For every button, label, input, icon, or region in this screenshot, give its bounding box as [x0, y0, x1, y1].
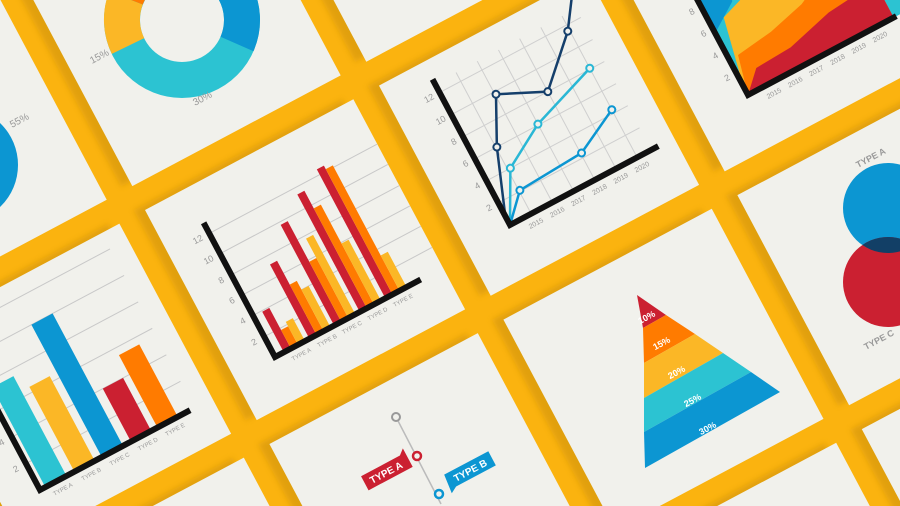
pyramid chart: 25% [682, 392, 703, 409]
stacked area chart: 2016 [787, 76, 804, 89]
pyramid chart: 30% [697, 420, 718, 437]
bar chart: single colored bars [0, 240, 201, 506]
tag: type B: TYPE B [452, 458, 489, 485]
line chart: 2017 [570, 195, 587, 208]
bar chart: single colored bars: 2 [11, 463, 20, 474]
line chart: 2016 [549, 206, 566, 219]
pyramid chart [636, 295, 780, 468]
bar chart: grouped red/orange/yellow: 2 [249, 336, 259, 348]
bar chart: single colored bars: TYPE E [165, 423, 186, 438]
line chart: 6 [461, 158, 470, 169]
bar chart: grouped red/orange/yellow: TYPE B [317, 334, 338, 349]
line chart: 2 [484, 202, 494, 213]
bar chart: grouped red/orange/yellow: TYPE D [367, 307, 390, 322]
tag: type A: TYPE A [368, 460, 405, 487]
stacked area chart: 6 [699, 28, 708, 39]
stacked area chart: 2017 [808, 65, 825, 78]
line chart: 10 [434, 113, 447, 127]
bar chart: single colored bars: TYPE A [53, 483, 74, 498]
bar chart: grouped red/orange/yellow: 10 [202, 253, 215, 267]
line chart [415, 0, 665, 246]
timeline [359, 413, 498, 504]
line chart: 8 [449, 136, 458, 147]
pie chart 55%: 55% [8, 111, 31, 131]
stacked area chart: 2015 [766, 87, 783, 101]
pyramid chart: 20% [666, 364, 687, 381]
bar chart: grouped red/orange/yellow: 8 [217, 275, 226, 286]
venn diagram: TYPE A [854, 146, 888, 170]
pie chart 55% [0, 107, 31, 223]
bar chart: single colored bars: TYPE C [109, 452, 132, 468]
bar chart: grouped red/orange/yellow: 6 [227, 295, 237, 306]
bar chart: grouped red/orange/yellow: 12 [191, 233, 205, 246]
donut chart: 15% [88, 47, 111, 67]
venn diagram [843, 146, 900, 352]
stacked area chart: 8 [687, 6, 696, 17]
bar chart: single colored bars: TYPE B [81, 467, 103, 483]
stacked area chart [657, 0, 900, 114]
pyramid chart: 15% [651, 335, 672, 352]
bar chart: grouped red/orange/yellow: 4 [238, 315, 247, 326]
donut chart [88, 0, 242, 109]
stacked area chart: 2019 [851, 42, 868, 56]
donut chart: 30% [191, 89, 214, 109]
line chart: 2019 [613, 172, 630, 186]
stacked area chart: 2020 [872, 31, 889, 44]
bar chart: grouped red/orange/yellow [188, 134, 449, 378]
line chart: 2018 [591, 183, 609, 197]
line chart: 12 [422, 91, 436, 105]
bar chart: grouped red/orange/yellow: TYPE A [291, 348, 312, 363]
bar chart: single colored bars: TYPE D [137, 437, 160, 453]
line chart: 2015 [528, 217, 545, 231]
stacked area chart: 4 [711, 50, 720, 61]
stacked area chart: 2018 [829, 53, 847, 67]
stacked area chart: 2 [722, 72, 732, 83]
line chart: 4 [473, 180, 482, 191]
bar chart: grouped red/orange/yellow: TYPE E [393, 293, 414, 309]
line chart: 2020 [634, 161, 651, 174]
venn diagram: TYPE C [862, 327, 896, 352]
bar chart: grouped red/orange/yellow: TYPE C [341, 320, 364, 336]
pyramid chart: 10% [636, 309, 657, 326]
